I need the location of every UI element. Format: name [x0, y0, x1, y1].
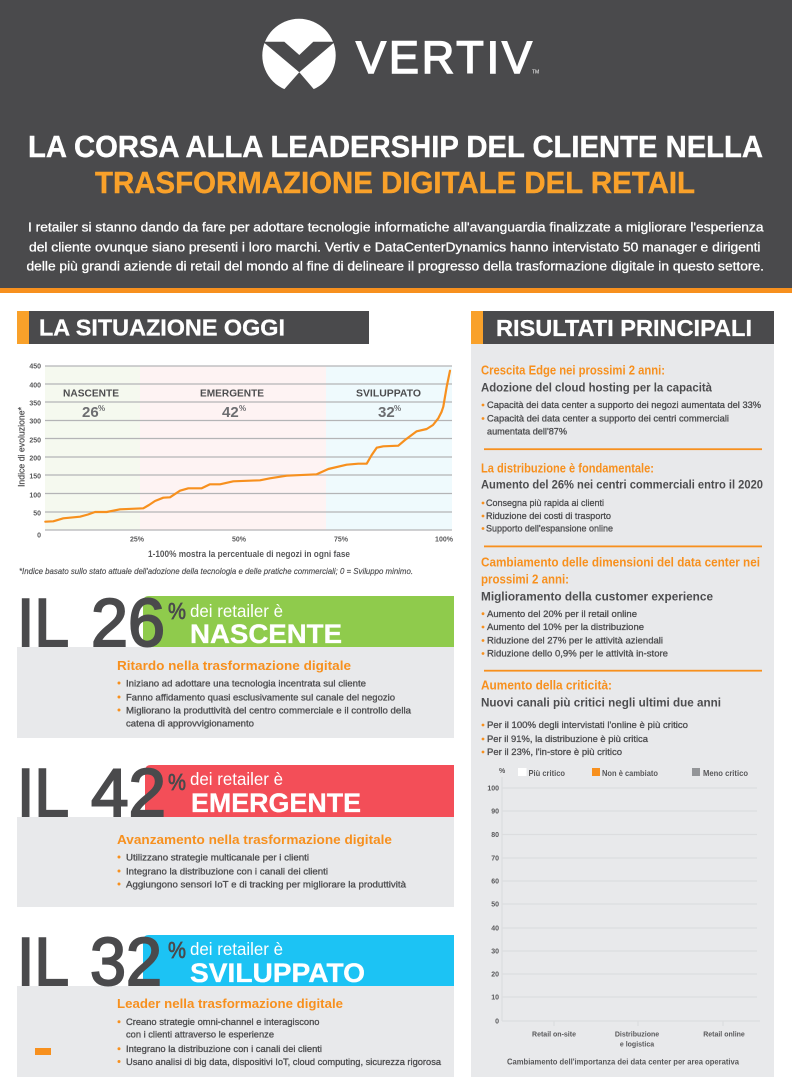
result: dimensioni data center: Aumento del 10% per la distribuzione [487, 622, 644, 633]
line chart: evolution index: 150 [29, 474, 41, 480]
panel: nascente: IL [17, 585, 69, 661]
chart: data center importance [487, 768, 760, 1066]
result: distribuzione [481, 462, 763, 534]
line chart: evolution index: 200 [29, 456, 41, 462]
result: crescita edge: Capacità dei data center a supporto dei negozi aumentata del 33% [487, 400, 762, 411]
chart: data center importance: 90 [491, 808, 499, 816]
line chart: evolution index: NASCENTE [63, 388, 119, 400]
line chart: evolution index: Indice di evoluzione* [16, 407, 28, 487]
intro text: del cliente ovunque siano presenti i loro marchi. Vertiv e DataCenterDynamics hanno intervistato 50 manager e dirigenti [29, 240, 761, 254]
heading: la situazione oggi [17, 311, 369, 344]
heading: risultati principali: RISULTATI PRINCIPALI [496, 315, 752, 341]
line chart: evolution index: 450 [29, 364, 41, 370]
intro text: delle più grandi aziende di retail del mondo al fine di delineare il progresso della trasformazione digitale in questo settore. [26, 258, 764, 274]
panel: nascente: % [168, 598, 186, 624]
chart: data center importance: 0 [495, 1018, 499, 1026]
result: crescita edge: Adozione del cloud hosting per la capacità [481, 380, 712, 394]
chart legend [499, 768, 748, 778]
result: crescita edge: aumentata dell'87% [487, 426, 568, 438]
line chart: evolution index: 25% [130, 536, 145, 544]
chart: data center importance: 50 [491, 902, 499, 908]
line chart: evolution index [16, 364, 454, 560]
intro text [26, 220, 764, 274]
result: criticita: Per il 91%, la distribuzione è più critica [487, 734, 649, 745]
line chart: evolution index: 300 [29, 418, 41, 426]
panel: emergente: EMERGENTE [191, 788, 361, 818]
chart: data center importance: Retail on-site [532, 1032, 576, 1038]
panel: sviluppato: Creano strategie omni-channel e interagiscono [126, 1017, 320, 1028]
line chart: evolution index: 350 [29, 400, 41, 408]
line chart: evolution index: 26 [82, 404, 99, 421]
line chart: evolution index: 0 [37, 532, 41, 540]
panel: sviluppato: con i clienti attraverso le esperienze [126, 1030, 274, 1040]
result: dimensioni data center: Riduzione dello 0,9% per le attività in-store [487, 648, 668, 660]
result: criticita: Aumento della criticità: [481, 678, 612, 692]
logo: Vertiv: VERTIV [356, 32, 532, 83]
chart: data center importance: 100 [487, 786, 499, 792]
panel: sviluppato: 32 [90, 924, 162, 1000]
line chart: evolution index: 400 [29, 382, 41, 390]
chart: data center importance: 80 [491, 832, 499, 839]
panel: emergente: dei retailer è [190, 769, 283, 789]
chart: data center importance: e logistica [620, 1042, 654, 1048]
chart: data center importance: Distribuzione [615, 1032, 659, 1038]
logo: Vertiv [262, 19, 539, 93]
line chart: evolution index: 100 [29, 492, 41, 500]
panel: sviluppato: Usano analisi di big data, dispositivi IoT, cloud computing, sicurezza rigorosa [126, 1057, 442, 1068]
result: distribuzione: Aumento del 26% nei centri commerciali entro il 2020 [481, 478, 763, 492]
panel: nascente: dei retailer è [190, 601, 283, 621]
result: criticita: Per il 23%, l'in-store è più critico [487, 747, 622, 758]
line chart: evolution index: 1-100% mostra la percentuale di negozi in ogni fase [148, 549, 350, 560]
panel: nascente: Migliorano la produttività del centro commerciale e il controllo della [126, 706, 412, 716]
result: distribuzione: Supporto dell'espansione online [486, 524, 613, 534]
line chart: evolution index: 250 [29, 438, 41, 444]
result: criticita [481, 678, 721, 758]
panel: sviluppato: Integrano la distribuzione con i canali dei clienti [126, 1044, 322, 1055]
chart: data center importance: 40 [491, 926, 499, 932]
line chart: evolution index: % [239, 404, 246, 413]
panel: sviluppato: IL [17, 924, 69, 1000]
title: LA CORSA ALLA LEADERSHIP DEL CLIENTE NELLA [28, 129, 763, 164]
chart footnote: *Indice basato sullo stato attuale dell'adozione della tecnologia e delle pratiche commerciali; 0 = Sviluppo minimo. [19, 567, 413, 576]
line chart: evolution index: SVILUPPATO [356, 388, 421, 400]
panel: sviluppato: SVILUPPATO [190, 958, 365, 988]
result: dimensioni data center: Cambiamento delle dimensioni del data center nei [481, 556, 760, 570]
chart legend: Non è cambiato [602, 768, 658, 778]
chart legend: Più critico [528, 768, 565, 778]
logo: Vertiv: TM [532, 70, 539, 76]
line chart: evolution index: 42 [222, 404, 239, 421]
line chart: evolution index: 75% [334, 536, 349, 544]
result: criticita: Per il 100% degli intervistati l'online è più critico [487, 720, 688, 731]
chart: data center importance: 30 [491, 948, 499, 956]
panel: emergente [17, 755, 454, 907]
result: dimensioni data center [481, 556, 760, 660]
panel: nascente: Iniziano ad adottare una tecnologia incentrata sul cliente [126, 678, 366, 690]
result: crescita edge: Crescita Edge nei prossimi 2 anni: [481, 364, 665, 378]
title [28, 129, 763, 200]
panel: emergente: IL [17, 755, 69, 831]
title: TRASFORMAZIONE DIGITALE DEL RETAIL [95, 165, 695, 200]
intro text: I retailer si stanno dando da fare per adottare tecnologie informatiche all'avanguardia finalizzate a migliorare l'esperienza [28, 220, 764, 234]
result: dimensioni data center: prossimi 2 anni: [481, 572, 569, 586]
chart: data center importance: Cambiamento dell'importanza dei data center per area operativa [507, 1058, 740, 1066]
line chart: evolution index: 50% [232, 536, 247, 544]
panel: nascente: NASCENTE [190, 619, 342, 649]
result: distribuzione: La distribuzione è fondamentale: [481, 462, 654, 476]
panel: emergente: % [168, 769, 186, 795]
panel: nascente: Fanno affidamento quasi esclusivamente sul canale del negozio [126, 692, 395, 704]
chart: data center importance: 10 [491, 994, 499, 1002]
chart legend: Meno critico [703, 768, 748, 778]
panel: emergente: Avanzamento nella trasformazione digitale [117, 833, 392, 847]
panel: nascente: 26 [91, 585, 165, 661]
heading: risultati principali [471, 311, 774, 344]
panel: nascente: catena di approvvigionamento [126, 718, 254, 730]
result: dimensioni data center: Aumento del 20% per il retail online [487, 609, 637, 620]
panel: sviluppato: % [168, 937, 186, 963]
panel: emergente: 42 [91, 755, 166, 831]
panel: nascente [17, 585, 454, 738]
line chart: evolution index: 32 [378, 404, 395, 421]
line chart: evolution index: 50 [33, 510, 41, 518]
panel: risultati principali [471, 311, 774, 1077]
chart: data center importance: 70 [491, 856, 499, 862]
line chart: evolution index: % [394, 404, 401, 413]
line chart: evolution index: 100% [435, 536, 454, 544]
chart: data center importance: 60 [491, 878, 499, 886]
panel: sviluppato [17, 924, 454, 1077]
chart: data center importance: Retail online [703, 1032, 745, 1038]
heading: la situazione oggi: LA SITUAZIONE OGGI [39, 314, 285, 340]
result: dimensioni data center: Riduzione del 27% per le attività aziendali [487, 636, 663, 646]
result: distribuzione: Consegna più rapida ai clienti [486, 498, 604, 509]
chart: data center importance: 20 [491, 972, 499, 978]
panel: emergente: Aggiungono sensori IoT e di tracking per migliorare la produttività [126, 880, 407, 890]
chart legend: % [499, 768, 506, 775]
line chart: evolution index: % [98, 404, 105, 413]
line chart: evolution index: EMERGENTE [200, 388, 264, 400]
panel: nascente: Ritardo nella trasformazione digitale [117, 659, 351, 673]
result: dimensioni data center: Miglioramento della customer experience [481, 590, 713, 604]
result: crescita edge: Capacità dei data center a supporto dei centri commerciali [487, 414, 729, 424]
result: crescita edge [481, 364, 762, 438]
result: distribuzione: Riduzione dei costi di trasporto [486, 511, 611, 522]
panel: sviluppato: Leader nella trasformazione digitale [117, 997, 343, 1011]
result: criticita: Nuovi canali più critici negli ultimi due anni [481, 696, 721, 710]
panel: sviluppato: dei retailer è [190, 939, 283, 959]
header band [0, 0, 792, 293]
panel: emergente: Utilizzano strategie multicanale per i clienti [126, 852, 309, 864]
panel: emergente: Integrano la distribuzione con i canali dei clienti [126, 866, 328, 878]
